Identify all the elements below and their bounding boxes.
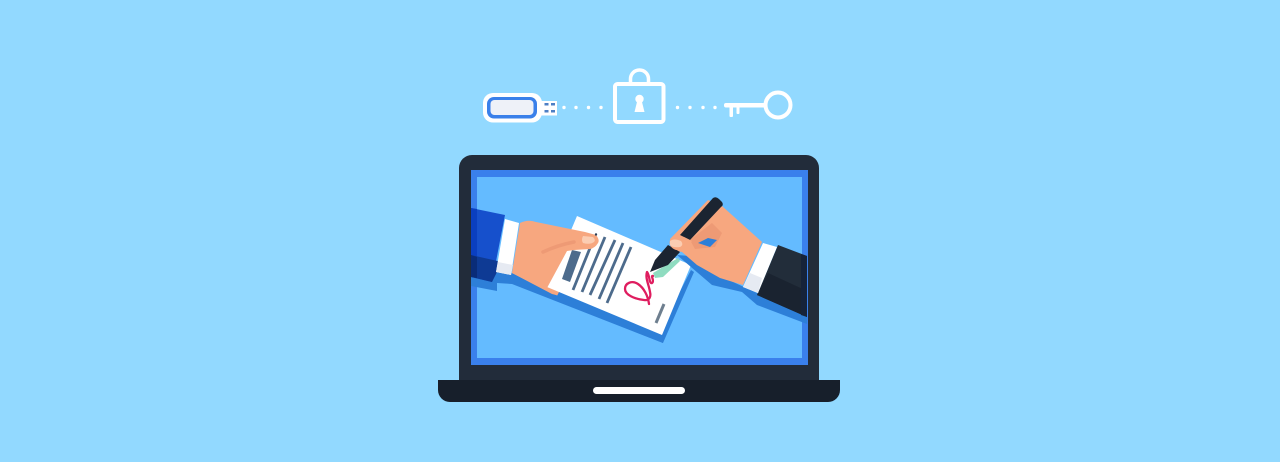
- palm shading: [690, 223, 722, 249]
- laptop lid: [459, 155, 819, 380]
- icon: key: [724, 92, 790, 118]
- pen: [680, 197, 723, 240]
- left palm lower edge: [512, 240, 570, 297]
- document text lines: [562, 237, 664, 323]
- laptop screen: [477, 177, 802, 358]
- right palm: [670, 200, 762, 285]
- document: [547, 216, 694, 343]
- laptop base: [438, 380, 840, 402]
- signature: [625, 272, 653, 304]
- laptop: [438, 155, 840, 402]
- palm gap: [698, 238, 717, 247]
- right hand with pen: [650, 197, 807, 324]
- laptop screen frame: [471, 170, 808, 365]
- thumb crease: [543, 242, 574, 252]
- left palm and thumb: [512, 221, 599, 288]
- icon: padlock: [615, 70, 664, 122]
- shadow under right arm and hand: [677, 255, 807, 324]
- right sleeve: [757, 245, 807, 317]
- document sheet: [547, 216, 691, 335]
- ink highlight: [653, 258, 680, 278]
- left hand over document: [512, 221, 599, 288]
- dotted connector: lock to key: [676, 106, 717, 109]
- right finger: [670, 237, 692, 250]
- thumbnail: [582, 236, 595, 244]
- right cuff: [743, 243, 777, 293]
- shadow under left arm and hand: [471, 272, 663, 343]
- left cuff: [496, 219, 519, 275]
- laptop trackpad slot: [593, 387, 685, 394]
- document shadow: [555, 270, 694, 343]
- left sleeve: [471, 208, 505, 282]
- icon: usb token: [483, 93, 557, 122]
- left arm: [471, 208, 663, 343]
- dotted connector: usb to lock: [562, 106, 603, 109]
